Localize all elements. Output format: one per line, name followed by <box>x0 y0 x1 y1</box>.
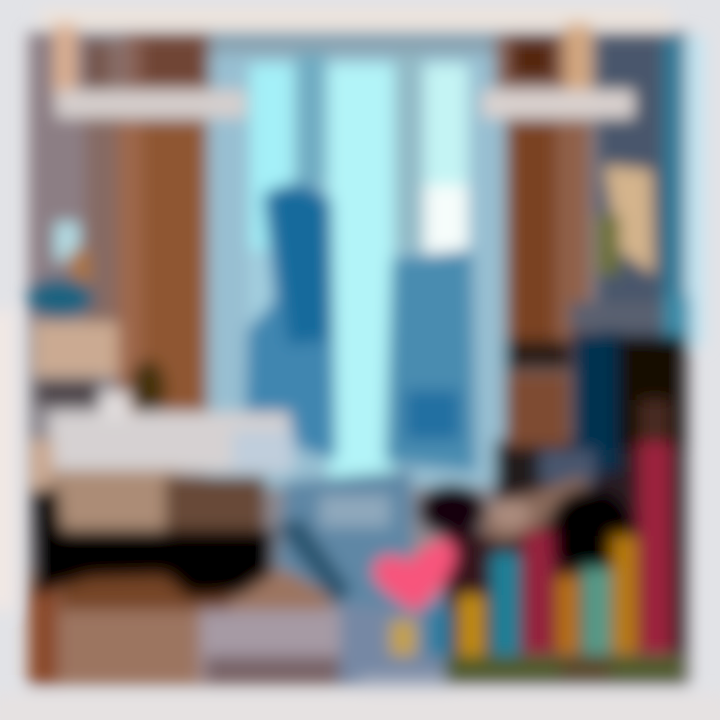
panel: left wall column <box>26 24 123 406</box>
bar chart <box>390 442 671 657</box>
panel: right brown curtain <box>495 24 591 370</box>
panel: left brown curtain <box>118 34 210 416</box>
chart dark backdrop <box>445 440 685 655</box>
chart green base <box>445 656 685 682</box>
laptop <box>274 470 412 610</box>
white horizontal rails <box>56 90 634 118</box>
floor <box>28 572 450 688</box>
bed <box>30 392 294 538</box>
skyline: blue towers <box>245 184 476 472</box>
far right light blue strip <box>686 36 704 346</box>
person silhouette <box>418 296 690 572</box>
panel: right dark wall <box>596 36 684 346</box>
panel: window <box>205 32 505 487</box>
icon: pink heart <box>373 540 456 612</box>
dark bed base <box>32 488 274 598</box>
